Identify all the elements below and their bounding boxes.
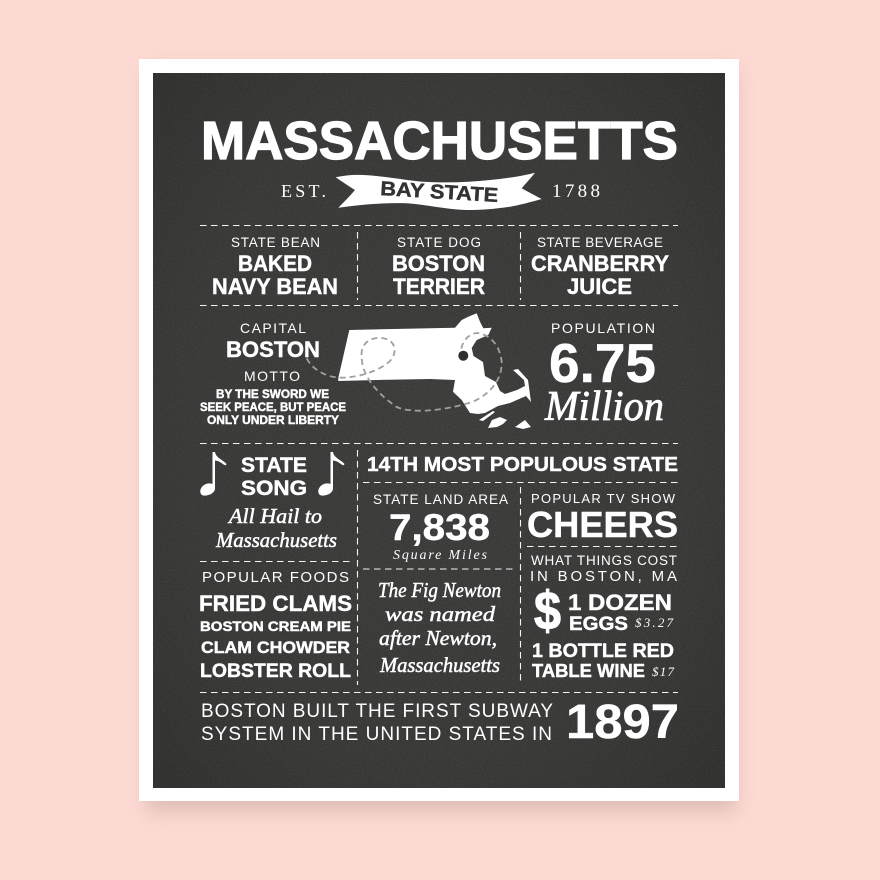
song title script: Massachusetts	[215, 528, 337, 552]
label: STATE BEAN	[231, 235, 320, 250]
panel: state bean	[212, 235, 338, 299]
label: POPULATION	[551, 320, 655, 336]
panel: popular tv show	[527, 491, 678, 545]
panel: state bean: NAVY BEAN	[212, 274, 338, 299]
label: STATE DOG	[397, 235, 481, 250]
label: STATE LAND AREA	[373, 492, 508, 507]
title: MASSACHUSETTS	[201, 112, 678, 171]
panel: state beverage: JUICE	[567, 274, 632, 299]
panel: population	[544, 320, 664, 430]
ribbon banner	[336, 173, 542, 210]
print frame shadow	[146, 70, 736, 812]
chalk texture	[153, 73, 725, 788]
panel: state dog	[392, 235, 485, 299]
panel: what things cost	[530, 553, 677, 681]
icon: dollar sign: $	[534, 581, 561, 641]
number: 6.75	[549, 332, 656, 394]
panel: what things cost: $17	[652, 664, 674, 679]
icon: left music note	[200, 452, 226, 496]
chalkboard panel	[153, 73, 725, 788]
icon: right music note	[318, 452, 344, 496]
panel: what things cost: IN BOSTON, MA	[530, 568, 677, 585]
map: Massachusetts silhouette	[307, 313, 531, 429]
panel: fig newton fact: after Newton,	[379, 626, 497, 650]
panel: state song: SONG	[241, 477, 307, 500]
capital marker	[458, 351, 468, 361]
panel: popular foods: BOSTON CREAM PIE	[200, 618, 351, 634]
rank banner: 14TH MOST POPULOUS STATE	[367, 453, 678, 476]
panel: state song	[200, 452, 344, 552]
wine price: 1 BOTTLE RED	[532, 640, 674, 662]
header ribbon row	[281, 173, 600, 210]
unit script: Million	[544, 384, 664, 430]
panel: what things cost: TABLE WINE	[532, 661, 645, 681]
panel: fig newton fact: was named	[385, 602, 496, 626]
motto label: MOTTO	[244, 368, 300, 384]
panel: state beverage	[531, 235, 669, 299]
fact text: BOSTON BUILT THE FIRST SUBWAY	[201, 701, 553, 722]
capital value: BOSTON	[226, 337, 320, 362]
label: STATE BEVERAGE	[537, 235, 663, 250]
panel: subway fact: SYSTEM IN THE UNITED STATES IN	[201, 724, 552, 745]
value: CRANBERRY	[531, 251, 669, 276]
ribbon banner: BAY STATE	[380, 178, 499, 207]
panel: land area	[373, 492, 508, 563]
number: 7,838	[389, 507, 490, 548]
panel: capital and motto	[200, 320, 346, 427]
capital label: CAPITAL	[240, 320, 306, 336]
song title script: All Hail to	[227, 504, 322, 528]
panel: fig newton fact: Massachusetts	[379, 653, 500, 677]
heading: STATE	[241, 454, 307, 477]
state outline	[338, 313, 531, 414]
motto text: BY THE SWORD WE	[216, 387, 329, 401]
value: BOSTON	[392, 251, 485, 276]
white print frame	[139, 59, 739, 801]
motto text: ONLY UNDER LIBERTY	[207, 413, 339, 427]
panel: fig newton fact: The Fig Newton	[378, 578, 501, 602]
motto text: SEEK PEACE, BUT PEACE	[200, 400, 346, 414]
label: POPULAR FOODS	[202, 569, 349, 586]
panel: subway fact	[201, 696, 679, 749]
established label: EST.	[281, 181, 326, 201]
dashed dividers	[200, 226, 678, 692]
unit: Square Miles	[393, 548, 488, 563]
panel: popular foods	[199, 569, 352, 682]
panel: what things cost: EGGS	[569, 613, 628, 635]
panel: what things cost: $3.27	[635, 615, 674, 630]
song title script	[215, 504, 337, 552]
panel: state dog: TERRIER	[393, 274, 485, 299]
value: BAKED	[238, 251, 312, 276]
label: WHAT THINGS COST	[531, 553, 677, 568]
year: 1897	[566, 696, 679, 749]
founding year: 1788	[552, 181, 600, 202]
panel: fig newton fact	[378, 578, 501, 677]
motto text	[200, 387, 346, 427]
panel: popular foods: CLAM CHOWDER	[201, 639, 350, 657]
label: POPULAR TV SHOW	[531, 491, 676, 506]
islands	[479, 411, 531, 429]
dashed route	[307, 333, 502, 411]
food list: FRIED CLAMS	[199, 591, 352, 616]
value: CHEERS	[527, 504, 678, 545]
panel: popular foods: LOBSTER ROLL	[200, 660, 351, 682]
egg price: 1 DOZEN	[568, 590, 672, 615]
